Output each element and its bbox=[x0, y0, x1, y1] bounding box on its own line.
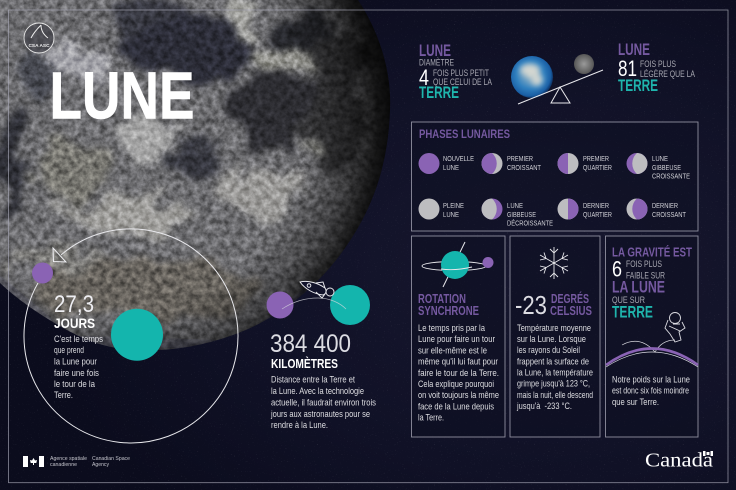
earth bbox=[511, 56, 553, 98]
orbit text: que prend bbox=[54, 345, 84, 356]
wordmark: Canada: Canada bbox=[645, 450, 713, 472]
temperature number: -23 bbox=[515, 290, 547, 320]
distance number: 384 400 bbox=[270, 330, 351, 358]
temperature text: mais la nuit, elle descend bbox=[517, 390, 593, 401]
comparison: mass: FOIS PLUS bbox=[640, 59, 676, 70]
gravity heading: FOIS PLUS bbox=[626, 259, 662, 270]
rotation text: Lune pour faire un tour bbox=[418, 334, 495, 345]
agency name: Agence spatiale bbox=[50, 456, 87, 462]
rotation text: Cela explique pourquoi bbox=[418, 379, 494, 390]
phases heading: PHASES LUNAIRES bbox=[419, 127, 510, 141]
orbit diagram: 27.3 days bbox=[24, 229, 238, 443]
orbit text: Terre. bbox=[54, 390, 73, 401]
rotation heading: ROTATION bbox=[418, 292, 466, 306]
phase: dernier croissant: DERNIER bbox=[652, 203, 678, 210]
orbit text: le tour de la bbox=[54, 379, 96, 390]
phase: lune gibbeuse decroissante: LUNE bbox=[507, 203, 523, 210]
orbit text: faire une fois bbox=[54, 368, 99, 379]
rotation text: la Terre. bbox=[418, 412, 444, 424]
phase: lune gibbeuse decroissante: GIBBEUSE bbox=[507, 212, 536, 219]
comparison: diameter: LUNE bbox=[419, 41, 451, 60]
phase: lune gibbeuse decroissante bbox=[482, 198, 553, 228]
rotation text: faire le tour de la Terre. bbox=[418, 368, 499, 379]
phase: nouvelle lune bbox=[418, 153, 474, 174]
phase: dernier quartier: DERNIER bbox=[583, 203, 609, 210]
gravity heading bbox=[612, 245, 692, 322]
agency logo bbox=[24, 23, 54, 53]
rotation text: Le temps pris par la bbox=[418, 323, 486, 334]
phase: nouvelle lune: NOUVELLE bbox=[443, 156, 474, 163]
distance earth bbox=[330, 285, 370, 325]
title: LUNE bbox=[50, 58, 194, 134]
comparison: mass: LÉGÈRE QUE LA bbox=[640, 69, 695, 80]
temperature text: grimpe jusqu'à 123 °C, bbox=[517, 378, 590, 390]
icon: balance with earth and moon bbox=[511, 54, 603, 104]
temperature text: les rayons du Soleil bbox=[517, 345, 580, 356]
rotation text: on voit toujours la même bbox=[418, 390, 499, 401]
phase: premier quartier: QUARTIER bbox=[583, 165, 612, 172]
icon: rocket bbox=[300, 281, 334, 298]
rotation text: sur elle-même est le bbox=[418, 346, 487, 356]
icon: canadian flag bbox=[23, 456, 44, 467]
gravity heading: 6 bbox=[612, 257, 622, 282]
phase: pleine lune bbox=[418, 198, 464, 220]
phase: nouvelle lune: LUNE bbox=[443, 165, 459, 172]
orbit unit: JOURS bbox=[54, 315, 95, 331]
agency name: Agency bbox=[92, 462, 109, 468]
icon: astronaut bbox=[665, 312, 685, 342]
moon photograph bbox=[0, 0, 390, 350]
distance text bbox=[270, 375, 376, 431]
gravity heading: LA GRAVITÉ EST bbox=[612, 245, 692, 260]
comparison: diameter: 4 bbox=[419, 65, 429, 90]
phase: dernier quartier bbox=[558, 198, 612, 220]
comparison: mass: 81 bbox=[618, 56, 637, 81]
phase: pleine lune: PLEINE bbox=[443, 203, 464, 210]
distance block: 384 400 km bbox=[266, 281, 376, 431]
distance text: Distance entre la Terre et bbox=[271, 375, 355, 386]
icon: snowflake bbox=[540, 247, 568, 279]
panel: gravity bbox=[606, 236, 698, 437]
rotation text: face de la Lune depuis bbox=[418, 402, 494, 412]
beam bbox=[518, 70, 603, 104]
rotation text: même qu'il lui faut pour bbox=[418, 357, 498, 368]
phase: lune gibbeuse croissante: GIBBEUSE bbox=[652, 165, 681, 172]
phase: dernier croissant: CROISSANT bbox=[652, 212, 687, 219]
phase: lune gibbeuse croissante: CROISSANTE bbox=[652, 174, 690, 180]
panel: temperature bbox=[510, 236, 600, 437]
distance text: actuelle, il faudrait environ trois bbox=[271, 398, 376, 408]
phase: premier quartier bbox=[558, 153, 612, 174]
phase: dernier croissant bbox=[626, 198, 687, 220]
distance moon bbox=[266, 292, 294, 318]
agency logo: CSA ASC bbox=[28, 43, 50, 48]
gravity heading: LA LUNE bbox=[612, 278, 665, 297]
phase: premier croissant bbox=[482, 153, 542, 174]
phase: dernier quartier: QUARTIER bbox=[583, 212, 612, 219]
gravity text: Notre poids sur la Lune bbox=[612, 375, 690, 386]
comparison: diameter bbox=[419, 41, 492, 102]
phase: lune gibbeuse croissante bbox=[626, 153, 690, 180]
footer: agency signature bbox=[23, 456, 130, 468]
rotation heading: SYNCHRONE bbox=[418, 304, 479, 318]
moon surface arc bbox=[606, 348, 698, 367]
phase: lune gibbeuse croissante: LUNE bbox=[652, 156, 668, 163]
icon: rotating moon bbox=[422, 242, 494, 287]
agency name bbox=[50, 456, 130, 468]
phase: pleine lune: LUNE bbox=[443, 212, 459, 219]
fulcrum bbox=[551, 87, 570, 103]
panel: lunar phases bbox=[412, 122, 698, 231]
gravity text bbox=[612, 375, 690, 408]
rotation text bbox=[418, 323, 499, 424]
orbit number: 27,3 bbox=[54, 291, 94, 318]
comparison: diameter: QUE CELUI DE LA bbox=[433, 77, 492, 88]
gravity heading: TERRE bbox=[612, 303, 653, 322]
temperature text: jusqu'à -233 °C. bbox=[516, 401, 572, 412]
phase: premier croissant: CROISSANT bbox=[507, 165, 542, 172]
distance text: rendre à la Lune. bbox=[271, 420, 328, 431]
orbit arrow bbox=[24, 229, 238, 443]
phase: lune gibbeuse decroissante: DÉCROISSANTE bbox=[507, 218, 553, 228]
gravity text: que sur Terre. bbox=[612, 397, 659, 408]
gravity heading: QUE SUR bbox=[612, 295, 645, 306]
temperature text: frappent la surface de bbox=[517, 356, 589, 368]
comparison: diameter: FOIS PLUS PETIT bbox=[433, 68, 489, 79]
agency name: Canadian Space bbox=[92, 456, 130, 462]
temperature text bbox=[516, 323, 593, 412]
temperature heading: CELSIUS bbox=[550, 304, 592, 318]
comparison: mass: LUNE bbox=[618, 40, 650, 59]
small moon bbox=[574, 54, 594, 74]
temperature text: Température moyenne bbox=[517, 323, 591, 334]
temperature heading bbox=[550, 291, 592, 318]
comparison: diameter: TERRE bbox=[419, 83, 459, 102]
moon dot bbox=[32, 262, 53, 284]
earth dot bbox=[111, 309, 163, 361]
agency name: canadienne bbox=[50, 462, 77, 468]
rotation heading bbox=[418, 292, 479, 318]
orbit text bbox=[54, 334, 103, 401]
comparison: diameter: DIAMÈTRE bbox=[419, 58, 454, 69]
temperature text: sur la Lune. Lorsque bbox=[517, 334, 586, 345]
panel: synchronous rotation bbox=[412, 236, 505, 437]
bounce path bbox=[622, 340, 675, 352]
orbit text: C'est le temps bbox=[54, 334, 103, 345]
temperature text: la Lune, la température bbox=[517, 368, 593, 378]
distance arc bbox=[282, 298, 346, 309]
gravity text: est donc six fois moindre bbox=[612, 386, 689, 396]
temperature heading: DEGRÉS bbox=[551, 291, 589, 306]
orbit text: la Lune pour bbox=[54, 356, 97, 368]
comparison: mass: TERRE bbox=[618, 76, 658, 95]
phase: premier quartier: PREMIER bbox=[583, 156, 609, 163]
distance text: jours aux astronautes pour se bbox=[270, 409, 370, 420]
distance unit: KILOMÈTRES bbox=[271, 356, 338, 371]
gravity heading: FAIBLE SUR bbox=[626, 271, 665, 282]
distance text: la Lune. Avec la technologie bbox=[271, 386, 364, 397]
comparison: mass bbox=[618, 40, 695, 95]
phase: premier croissant: PREMIER bbox=[507, 156, 533, 163]
